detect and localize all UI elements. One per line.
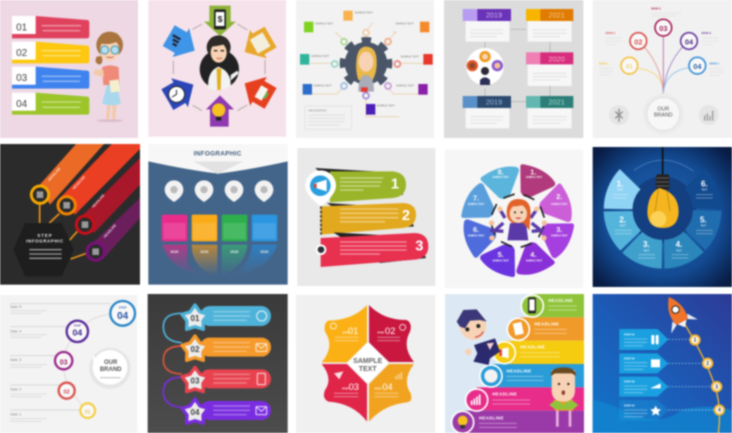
segment captions xyxy=(613,190,713,258)
segment captions: TEXT xyxy=(700,226,707,228)
ribbon 2: 2 xyxy=(402,208,410,224)
icon: megaphone arrow xyxy=(236,69,279,113)
sample text tags: SAMPLE TEXT xyxy=(311,54,330,58)
numbered nodes: 2 xyxy=(706,361,709,367)
fan shapes with years xyxy=(162,245,277,276)
panel: hexagon arrows around businesswoman xyxy=(148,0,286,137)
petal captions: SAMPLE TEXT xyxy=(468,203,485,206)
cartoon man with money xyxy=(549,367,578,427)
map pin icons xyxy=(165,180,273,202)
step 04: STEP xyxy=(375,387,382,391)
card 2021 orange: 2021 xyxy=(549,11,565,20)
connector lines xyxy=(311,23,433,117)
star badges xyxy=(182,305,208,423)
step circles: 01 xyxy=(85,409,91,415)
colored cards xyxy=(162,215,277,241)
ribbon 1: 1 xyxy=(391,176,399,192)
panel: eight petals around woman xyxy=(445,150,584,288)
segment numbers: 4. xyxy=(676,240,682,249)
segment numbers xyxy=(617,179,708,249)
ribbon step 03: 03 xyxy=(16,73,28,84)
circle icons xyxy=(458,297,536,428)
petal numbers: 8. xyxy=(498,167,504,176)
step circles: 04 xyxy=(117,311,129,322)
step 04: 04 xyxy=(382,382,393,392)
icon: clock arrow xyxy=(159,70,202,114)
panel: three colored ribbons xyxy=(297,148,435,286)
step circles: 04 xyxy=(693,62,702,71)
step labels: SKIN 2 xyxy=(605,31,615,35)
sample text tags: SAMPLE TEXT xyxy=(401,55,419,59)
icon: side badge left xyxy=(609,105,629,125)
step circles: 03 xyxy=(60,360,68,367)
step 01: STEP xyxy=(343,331,350,335)
segment numbers: 5. xyxy=(700,215,707,224)
center diamond with text xyxy=(347,342,388,384)
branching lines xyxy=(638,36,689,93)
step circles: 02 xyxy=(64,390,70,396)
step labels: SKIN 1 xyxy=(709,62,719,66)
step text xyxy=(624,333,647,417)
card 2021 teal: 2021 xyxy=(549,98,565,107)
step labels: Sale 4 xyxy=(10,328,22,333)
step 04 xyxy=(375,372,401,397)
panel: infographic with map pins xyxy=(148,144,288,285)
our brand badge xyxy=(89,348,131,389)
woman with many arms xyxy=(489,199,547,241)
step cards xyxy=(619,329,668,421)
step 01 xyxy=(330,323,358,341)
gear center xyxy=(629,176,696,243)
step circles: 04 xyxy=(685,37,694,46)
star badges: 01 xyxy=(191,314,200,323)
step labels: Sale 5 xyxy=(10,304,22,309)
icon circles xyxy=(452,295,543,433)
petal numbers: 7. xyxy=(473,193,479,202)
segment captions: TEXT xyxy=(620,226,626,228)
step labels: Sale 2 xyxy=(10,387,22,392)
segment captions: TEXT xyxy=(643,250,650,252)
teacher character xyxy=(93,32,123,122)
sample text tags: SAMPLE TEXT xyxy=(395,22,414,26)
band labels: HEADLINE xyxy=(47,166,62,182)
six segments xyxy=(592,169,732,280)
headline labels: HEADLINE xyxy=(548,298,573,303)
card 2019 navy: 2019 xyxy=(486,98,502,107)
step 02: 02 xyxy=(385,326,395,336)
step circles xyxy=(55,301,135,418)
panel: headline stairs with characters xyxy=(445,294,584,433)
petal numbers: 5. xyxy=(498,250,504,259)
star badges: 04 xyxy=(191,408,200,417)
hexagon with step infographic text xyxy=(13,223,74,276)
petal captions: SAMPLE TEXT xyxy=(551,203,568,206)
lightbulb xyxy=(647,147,679,228)
panel: star steps on dark xyxy=(148,294,288,433)
our brand badge: OUR xyxy=(104,360,118,366)
businesswoman portrait xyxy=(200,35,239,90)
background waves xyxy=(593,400,732,433)
diagonal bands xyxy=(38,144,140,258)
step circles: STEP xyxy=(119,306,127,310)
headline labels: HEADLINE xyxy=(534,321,559,326)
rocket trail xyxy=(683,321,719,433)
sample text tags: SAMPLE TEXT xyxy=(377,104,395,108)
petal captions: SAMPLE TEXT xyxy=(493,176,509,179)
our brand circle: OUR xyxy=(657,107,669,113)
hexagon with step infographic text: INFOGRAPHIC xyxy=(26,239,64,244)
step 03: STEP xyxy=(342,387,349,391)
ribbon step 02: 02 xyxy=(16,48,28,59)
label lines xyxy=(10,304,110,410)
ring segments xyxy=(173,24,265,111)
connector lines xyxy=(485,29,550,102)
ribbon 3: 3 xyxy=(415,239,423,255)
segment numbers: 6. xyxy=(701,179,708,188)
step text: STEP 04 xyxy=(624,404,635,408)
headline labels xyxy=(479,298,577,427)
fan shapes with years: 2020 xyxy=(260,250,268,254)
panel: timeline cards xyxy=(444,0,583,138)
card 2019 purple: 2019 xyxy=(486,11,502,20)
our brand circle xyxy=(643,93,684,135)
icon: document arrow xyxy=(236,23,279,66)
petal captions xyxy=(468,176,568,262)
step text: STEP 01 xyxy=(624,333,635,337)
step text: STEP 03 xyxy=(624,380,635,384)
segment captions: TEXT xyxy=(676,250,683,252)
dashed leaders xyxy=(668,339,714,410)
petal captions: SAMPLE TEXT xyxy=(493,259,509,262)
segment numbers: 1. xyxy=(617,179,623,188)
petal numbers: 4. xyxy=(530,250,536,259)
businessman character xyxy=(455,307,500,365)
step 03 xyxy=(334,371,359,397)
black dot xyxy=(317,245,325,254)
petal numbers: 3. xyxy=(556,225,562,234)
petal numbers: 1. xyxy=(530,167,536,176)
step labels xyxy=(599,6,724,75)
icon: phone arrow: $ xyxy=(218,14,223,24)
step circles: STEP xyxy=(74,323,81,327)
headline bars xyxy=(462,294,584,433)
rocket xyxy=(656,290,698,334)
infographic note box: INFOGRAPHIC xyxy=(308,109,327,113)
our brand badge: BRAND xyxy=(100,367,122,373)
quadrants xyxy=(322,305,414,422)
panel: sample text ornament xyxy=(296,295,435,433)
segment captions: TEXT xyxy=(617,190,624,192)
gear with portrait xyxy=(343,41,389,92)
headline labels: HEADLINE xyxy=(520,345,545,350)
step circles: 01 xyxy=(626,65,633,71)
title: INFOGRAPHIC xyxy=(194,151,242,158)
numbered nodes: 1 xyxy=(694,338,697,344)
step labels: SKIN 5 xyxy=(701,31,711,35)
petal captions: SAMPLE TEXT xyxy=(526,176,543,179)
headline labels: HEADLINE xyxy=(479,415,504,420)
thin arc xyxy=(634,160,693,171)
segment captions: TEXT xyxy=(701,190,708,192)
step labels xyxy=(10,304,47,421)
people circle xyxy=(466,48,504,85)
petal numbers: 2. xyxy=(556,192,562,201)
sample text tags: SAMPLE TEXT xyxy=(313,84,332,88)
center diamond with text: TEXT xyxy=(359,366,377,373)
step circles xyxy=(31,186,104,260)
petals xyxy=(451,154,584,287)
star badges: 03 xyxy=(191,376,200,385)
step text: STEP 02 xyxy=(624,356,635,360)
connecting arc xyxy=(63,314,112,411)
icon: lightbulb arrow xyxy=(206,95,234,127)
step circles: 02 xyxy=(634,37,642,46)
panel: rocket path steps xyxy=(593,290,732,433)
hexagon with step infographic text: STEP xyxy=(37,233,53,238)
sample text tags: SAMPLE TEXT xyxy=(396,84,415,88)
pill rows xyxy=(200,306,271,420)
step 03: 03 xyxy=(349,382,359,392)
step 02: STEP xyxy=(377,331,384,335)
step circles: 03 xyxy=(659,24,667,33)
panel: brand timeline circles xyxy=(0,295,137,433)
panel: brand tree with steps xyxy=(593,0,732,138)
headline labels: HEADLINE xyxy=(507,368,531,373)
ribbon step 01: 01 xyxy=(16,23,28,34)
icon: chart arrow xyxy=(160,21,203,65)
petal numbers: 6. xyxy=(473,225,479,234)
panel: step infographic diagonal bands xyxy=(0,144,140,285)
band labels: HEADLINE xyxy=(91,193,106,209)
numbered nodes: 3 xyxy=(715,384,718,390)
segment numbers: 3. xyxy=(643,240,650,249)
card 2020 pink: 2020 xyxy=(549,54,565,63)
sample text tags xyxy=(300,11,433,115)
icon: megaphone pin xyxy=(305,170,336,206)
connectors xyxy=(40,203,87,259)
petal captions: SAMPLE TEXT xyxy=(468,234,485,237)
numbered nodes: 4 xyxy=(718,408,721,414)
step circles: 04 xyxy=(73,327,82,337)
step labels: Sale 3 xyxy=(10,357,22,362)
fan shapes with years: 2020 xyxy=(170,250,178,254)
card icons xyxy=(650,335,661,416)
numbered nodes xyxy=(690,335,724,415)
connector nodes xyxy=(332,30,400,99)
fan shapes with years: 2020 xyxy=(230,250,238,254)
panel: lightbulb gear segments xyxy=(592,147,732,287)
panel: step ribbons with teacher xyxy=(0,0,138,138)
icon: side badge right xyxy=(699,105,719,125)
step labels: Sale 1 xyxy=(10,411,22,416)
petal numbers xyxy=(473,167,562,259)
our brand circle: BRAND xyxy=(654,113,673,119)
band labels: HEADLINE xyxy=(103,223,118,239)
segment numbers: 2. xyxy=(619,215,626,224)
fan shapes with years: 2020 xyxy=(200,250,208,254)
sample text tags: SAMPLE TEXT xyxy=(355,11,373,15)
step labels: SKIN 1 xyxy=(599,61,609,65)
step 01: 01 xyxy=(348,326,358,336)
step labels: SKIN 3 xyxy=(651,6,661,10)
headline labels: HEADLINE xyxy=(492,392,517,397)
pill icons xyxy=(256,311,267,415)
star badges: 02 xyxy=(191,345,200,354)
step 02 xyxy=(377,324,406,341)
step circles xyxy=(621,19,706,74)
linking arcs xyxy=(163,313,182,407)
petal captions: SAMPLE TEXT xyxy=(551,234,568,237)
panel: gear with connected labels xyxy=(296,0,434,138)
band labels: HEADLINE xyxy=(72,174,87,190)
band labels xyxy=(47,166,118,239)
sample text tags: SAMPLE TEXT xyxy=(315,22,334,26)
petal captions: SAMPLE TEXT xyxy=(526,259,543,262)
center diamond with text: SAMPLE xyxy=(353,358,383,365)
ribbon step 04: 04 xyxy=(16,99,28,110)
